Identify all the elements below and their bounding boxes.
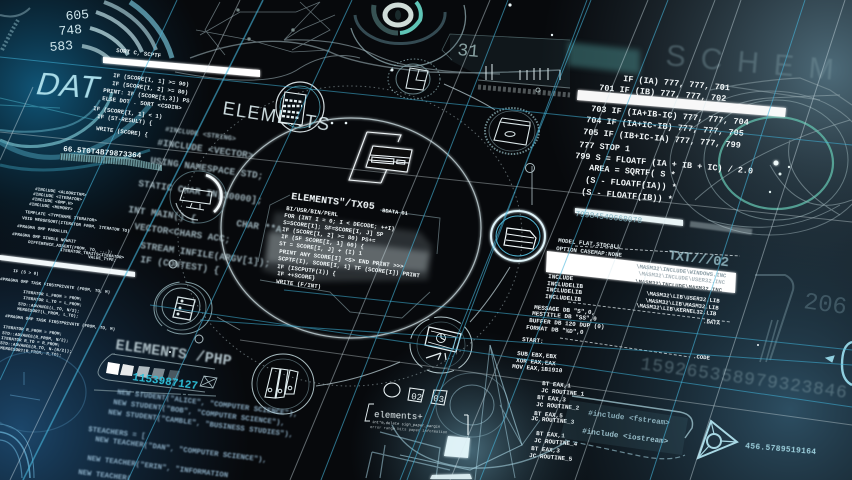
bottom left blue rings (0, 352, 86, 478)
digits pi faint: 159265358979323846 (639, 355, 849, 404)
code block top-left: WRITE (SCORE) { (96, 125, 148, 138)
numbers 605 748 583 (49, 7, 90, 55)
blurred code bottom left: $TEACHERS = [ (88, 426, 146, 441)
code right panel: (S - FLOATF(IB)) * (581, 187, 673, 205)
center code block (276, 205, 421, 290)
serial number and striped bar: 66.5T0T4B79873364 (63, 146, 142, 161)
assembly code: SUB EBX,EBX (517, 350, 557, 360)
icon: card printer highlighted (491, 211, 545, 261)
assembly code: INCLUDELIB (547, 280, 584, 290)
code right panel (575, 74, 753, 205)
number 456: 456.5789519164 (745, 442, 817, 457)
main circle (221, 118, 481, 338)
code right panel: (S - FLOATF(IA)) * (585, 175, 677, 193)
icon: clipboard top (388, 59, 440, 99)
assembly code: BUFFER DB 120 DUP (0) (529, 317, 605, 331)
center code block: S=SCORE[I]; SF=SCORE[I, J] SP (283, 219, 384, 238)
top eye dial (351, 2, 466, 67)
assembly code: MESTITLE DB "SS",0 (532, 310, 597, 323)
assembly code: MOV EAX,1B1910 (512, 363, 563, 374)
code block top-left: PRINT: IF (SCORE[1,3]) PS (103, 87, 190, 105)
radar arcs top-left (0, 2, 172, 170)
radar right (670, 78, 852, 235)
panel include iostream: #include <iostream> (582, 428, 669, 447)
code block top-left: IF (SCORE[I, 1] < 1) (93, 105, 163, 120)
icon: presentation board (410, 317, 472, 373)
blurred include text: INT MAIN() { (128, 204, 197, 224)
include code: .DATA (703, 318, 721, 327)
code right panel: 799 S = FLOATF (IA + IB + IC) / 2.0 (575, 151, 753, 177)
code under left bar: ITERATOR R_TO = R_FROM; (1, 336, 60, 348)
assembly code: START: (522, 336, 544, 345)
code right panel: IF (IA) 777, 777, 701 (623, 74, 730, 93)
assembly code: INCLUDELIB (546, 286, 583, 296)
assembly code: FORMAT DB "%D",0 (526, 324, 584, 336)
code right panel: 777 STOP 1 (579, 140, 630, 154)
include code: \MASM32\LIB\MASM32.LIB (645, 297, 720, 312)
code block top-left: IF (SCORE[I, 1] >= 90) (113, 72, 190, 88)
blurred code bottom left (78, 389, 298, 480)
label elements+ (365, 404, 448, 435)
orbit ring (169, 84, 534, 386)
top data panel 31: 31 (456, 41, 480, 63)
faint clip panel right: 206 (802, 289, 848, 322)
code under left bar: ITERATOR L_TO = L_FROM; (23, 296, 82, 308)
code under left bar (0, 269, 115, 359)
code right panel: 704 IF (IA+IC-IB) 777, 777, 705 (586, 115, 744, 139)
code right panel: AREA = SQRTF( S * (589, 163, 676, 181)
progress bar panel: 1153987127 (131, 372, 198, 393)
white bar right (577, 90, 786, 117)
code block top-left: SORT C, SCPTF (116, 47, 162, 60)
blurred code bottom left: NEW STUDENT("CAMBLE", "BUSINESS STUDIES"), (108, 409, 294, 440)
code right panel: 701 IF (IB) 777, 777, 702 (599, 83, 727, 104)
assembly code: JC ROUTINE_2 (536, 401, 580, 412)
assembly code: XOR EAX,EAX (516, 357, 556, 367)
assembly code: JC ROUTINE_3 (531, 415, 575, 426)
blurred code bottom left: NEW TEACHER("DAN", "COMPUTER SCIENCE"), (95, 436, 267, 465)
icon right edge ring (826, 342, 852, 385)
assembly code: JC ROUTINE_5 (529, 452, 573, 463)
badges 02 03 (384, 383, 447, 405)
numbers 605 748 583: 583 (49, 38, 74, 55)
small code left: #INCLUDE <ALGORITHM> (35, 187, 87, 198)
white bar serial right (575, 208, 752, 232)
center code block: IF (ISCPUTF(I)) { (277, 263, 336, 277)
blurred include text (128, 126, 283, 276)
blurred include text: #INCLUDE <STRING> (165, 126, 236, 144)
heading SCHEM faint: SCHEM (664, 39, 850, 88)
include code: \MASM32\INCLUDE\WINDOWS.INC (636, 263, 727, 280)
assembly code: JC ROUTINE_4 (534, 437, 578, 448)
heading ELEMENTS TX05: ELEMENTS"/TX05 (291, 191, 375, 213)
code under left bar: MERGESORT(R_FROM, R_TO); (0, 346, 62, 359)
white bar top-left (103, 57, 260, 77)
small code left: ITERATOR_TRAITS<ITERATOR> (60, 248, 125, 261)
heading ELEMENTS: ELEMENTS (221, 98, 332, 135)
white bar serial right: 79984549668078 (575, 210, 643, 226)
faint teal banner (568, 42, 640, 74)
include code: \MASM32\INCLUDE\MASM32.INC (635, 278, 723, 294)
badges 02 03: 03 (433, 394, 444, 405)
include code: .CODE (693, 353, 711, 362)
center code block: FOR (INT I = 0; I < DECODE; ++I) (284, 212, 395, 233)
small code left: VALUE_TYPE; (88, 255, 117, 263)
code under left bar: ITERATOR L_FROM = FROM; (23, 290, 82, 302)
code right panel: 703 IF (IA+IB-IC) 777, 777, 704 (591, 104, 749, 128)
code model flat: MODEL FLAT,STDCALL (558, 237, 621, 251)
top network lines (175, 2, 560, 80)
code under left bar: STD::ADVANCE(R_FROM, N/2); (2, 331, 69, 344)
code under left bar: MERGESORT(L_FROM, L_TO); (17, 307, 79, 320)
blurred code bottom left: NEW TEACHER("ERIN", "INFORMATION (87, 455, 228, 480)
small code left: TEMPLATE <TYPENAME ITERATOR> (25, 210, 97, 224)
icon: monitor (170, 171, 226, 223)
icon: server rack (154, 282, 212, 334)
assembly code: INCLUDE (548, 273, 574, 282)
code under left bar: #PRAGMA OMP TASK FIRSTPRIVATE (FROM, TO, M) (0, 277, 110, 295)
top data panel 31 (442, 34, 570, 95)
assembly code: JC ROUTINE_1 (541, 387, 585, 398)
code model flat (556, 237, 623, 259)
center code block: IF ++SCORE} (277, 270, 316, 282)
include code: \MASM32\LIB\KERNEL32.LIB (636, 302, 717, 317)
code block top-left: IF (SCORE[I, 2] >= 80) (112, 80, 189, 96)
code model flat: OPTION CASEMAP:NONE (556, 245, 623, 259)
big white block (546, 251, 736, 293)
blurred include text: STREAM INFILE(ARGV[1]); (140, 240, 271, 269)
center code block: PRINT ANY SCORE[I] <S> END PRINT >>> (279, 248, 404, 270)
assembly code: BT EAX,5 (534, 410, 564, 420)
white bar left (0, 255, 135, 277)
heading ELEMENTS PHP: ELEMENTS /PHP (114, 337, 233, 370)
blurred include text: STATIC CHAR IN[30000]; (138, 178, 263, 206)
small code left: #INCLUDE <MEMORY> (29, 202, 73, 212)
heading TXT//02: TXT///02 (667, 248, 729, 271)
icon: center phone with card (349, 132, 412, 183)
code block top-left (93, 47, 190, 138)
blurred code bottom left: NEW STUDENT("ALICE", "COMPUTER SCIENCE"), (117, 389, 298, 419)
small code left: DIFFERENCE_ASSERT(FROM, TO, ...); (28, 240, 113, 255)
code block top-left: ELSE DOT . SORT <CSDIN> (102, 95, 183, 112)
blurred include text: #INCLUDE <VECTOR> (157, 137, 254, 162)
faint clip panel right (755, 275, 848, 362)
icon: folder box (485, 108, 539, 154)
numbers 605 748 583: 605 (65, 7, 90, 24)
icon: calculator tablet (276, 82, 324, 132)
assembly code: BT EAX,3 (537, 394, 567, 404)
blurred include text: VECTOR<CHARS ACC; (134, 221, 231, 245)
icon: binders (252, 354, 314, 414)
label DAT: DAT (32, 67, 105, 105)
code right panel: 705 IF (IB+IC-IA) 777, 777, 799 (583, 127, 741, 151)
glowing squares bottom (430, 436, 472, 479)
center code block: WRITE (F/INT) (276, 278, 322, 290)
bottom center hud (366, 345, 566, 480)
panel include iostream (560, 396, 692, 459)
numbers 605 748 583: 748 (58, 22, 83, 39)
small code left: #INCLUDE <OMP.H> (32, 197, 74, 207)
serial number and striped bar (60, 146, 162, 171)
code under left bar: STD::ADVANCE(L_TO, N/2); (18, 302, 80, 315)
assembly code: BT EAX,3 (531, 445, 561, 455)
icon: triangle target (698, 421, 737, 458)
blurred include text: USING NAMESPACE STD; (150, 155, 264, 182)
small code left (12, 187, 130, 263)
include code (635, 263, 727, 362)
center code block: ST = SCORE[I, J] + (I) 1 (279, 240, 363, 257)
center code block: BDATA 01 (382, 208, 408, 217)
code block top-left: IF (ST-RESULT) { (97, 113, 153, 127)
assembly code (512, 273, 605, 463)
include code: \MASM32\LIB\USER32.LIB (646, 290, 721, 305)
panel include iostream: #include <fstream> (588, 410, 670, 428)
dashed separator lines (560, 246, 740, 357)
assembly code: INCLUDELIB (545, 293, 582, 303)
progress bar panel (94, 354, 217, 396)
center translucent panel (258, 195, 440, 318)
sparkle highlights (169, 3, 759, 353)
label elements+: error range bits paper information (370, 425, 448, 435)
code under left bar: IF (S > 0) (13, 269, 39, 277)
label elements+: elements+ (374, 410, 423, 423)
blurred include text: CHAR **A (236, 218, 283, 235)
assembly code: BT EAX,1 (542, 380, 572, 390)
small code left: #PRAGMA OMP SINGLE NOWAIT (12, 232, 77, 245)
small code left: #PRAGMA OMP PARALLEL (17, 224, 69, 235)
center code block: BI/USR/BIN/PERL (286, 205, 339, 218)
small code left: VOID MERGESORT(ITERATOR FROM, ITERATOR TO) (22, 216, 130, 234)
blurred code bottom left: NEW STUDENT("BOB", "COMPUTER SCIENCE"), (113, 399, 285, 428)
assembly code: BT EAX,1 (536, 430, 566, 440)
center code block: IF (SCORE[I, 2] >= 80) PS+= (282, 226, 376, 244)
assembly code: MESSAGE DB "S",0, (534, 304, 595, 316)
code under left bar: ITERATOR R_FROM = FROM; (3, 325, 62, 337)
code under left bar: STD::ADVANCE(R_TO, N-(N/2)); (0, 341, 72, 355)
small code left: #INCLUDE <ITERATOR> (33, 192, 82, 203)
code under left bar: #PRAGMA OMP TASK FIRSTPRIVATE (FROM, TO, M) (5, 314, 115, 332)
include code: \MASM32\INCLUDE\USER32.INC (638, 270, 726, 286)
label elements+: int*m,delete sign_paper_margin (372, 420, 440, 430)
center code block: IF (SF SCORE[I, 1] 60) { (281, 233, 364, 250)
badges 02 03: 02 (411, 392, 422, 403)
center code block: SCPTF(I), SCORE[I, 1] TF (SCORE[I]) PRINT (278, 255, 421, 279)
blurred include text: IF (CONTEST) { (140, 254, 220, 276)
